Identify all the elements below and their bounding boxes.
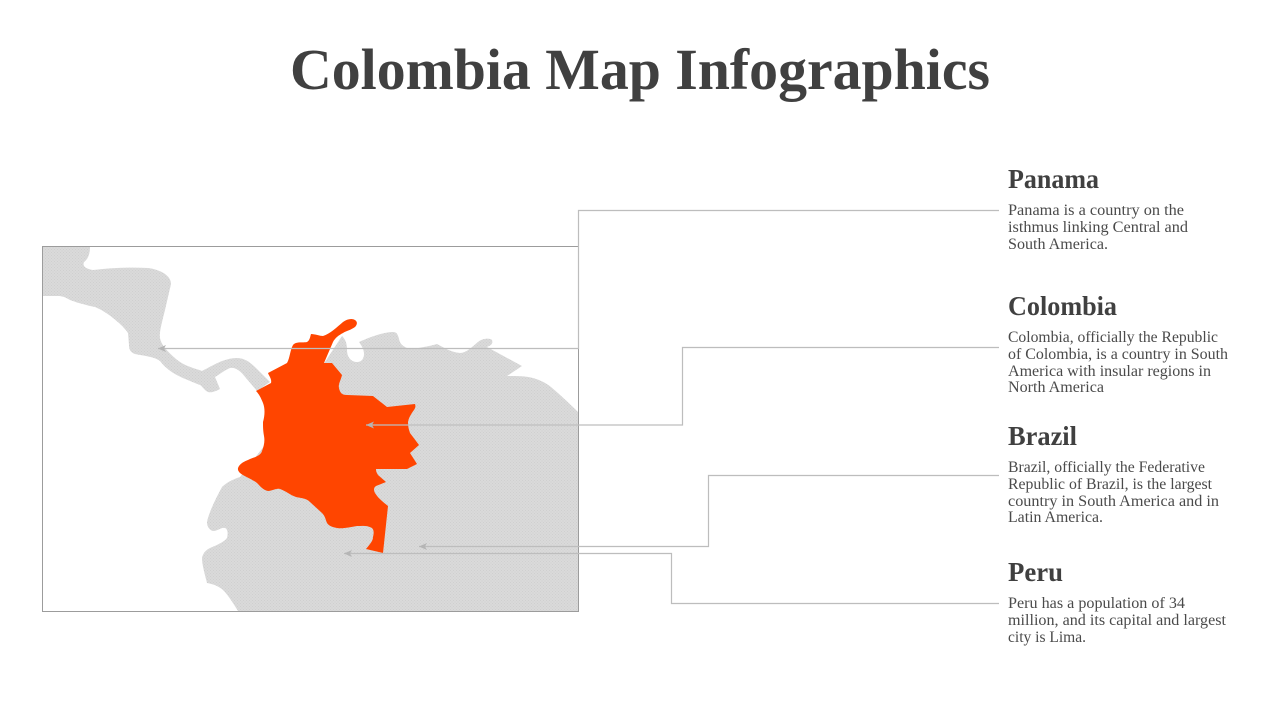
- text block: Peru: Peru has a population of 34: [1008, 595, 1185, 612]
- text block: Brazil: Latin America.: [1008, 509, 1103, 526]
- arrow: Panama: [158, 210, 999, 348]
- text block: Brazil: [1008, 421, 1219, 526]
- text block: Brazil: country in South America and in: [1008, 493, 1219, 510]
- text block: Panama: isthmus linking Central and: [1008, 219, 1188, 236]
- text block: Brazil: Republic of Brazil, is the largest: [1008, 476, 1213, 493]
- arrow: Colombia: [366, 348, 999, 425]
- panel: map: [42, 246, 578, 612]
- text block: Colombia: Colombia: [1008, 291, 1117, 321]
- map: South America: [202, 332, 578, 611]
- map: Central America: [43, 247, 270, 392]
- arrow: Peru: [344, 554, 999, 604]
- text block: Panama: Panama is a country on the: [1008, 202, 1184, 219]
- map: Colombia: [238, 319, 419, 553]
- text block: Colombia: of Colombia, is a country in South: [1008, 346, 1228, 363]
- map frame: [42, 246, 578, 612]
- arrow: Brazil: [419, 476, 999, 546]
- text block: Peru: city is Lima.: [1008, 629, 1086, 646]
- text block: Peru: [1008, 557, 1227, 646]
- text block: Brazil: Brazil: [1008, 421, 1077, 451]
- text block: Brazil: Brazil, officially the Federative: [1008, 459, 1205, 476]
- text block: Colombia: America with insular regions in: [1008, 363, 1211, 380]
- text block: Peru: Peru: [1008, 557, 1063, 587]
- title: Colombia Map Infographics: [290, 37, 990, 102]
- text block: Peru: million, and its capital and largest: [1008, 612, 1227, 629]
- text block: Panama: [1008, 164, 1188, 253]
- text block: Panama: Panama: [1008, 164, 1099, 194]
- text block: Colombia: [1008, 291, 1228, 396]
- text block: Colombia: North America: [1008, 379, 1104, 396]
- text block: Panama: South America.: [1008, 236, 1108, 253]
- text block: Colombia: Colombia, officially the Republic: [1008, 329, 1218, 346]
